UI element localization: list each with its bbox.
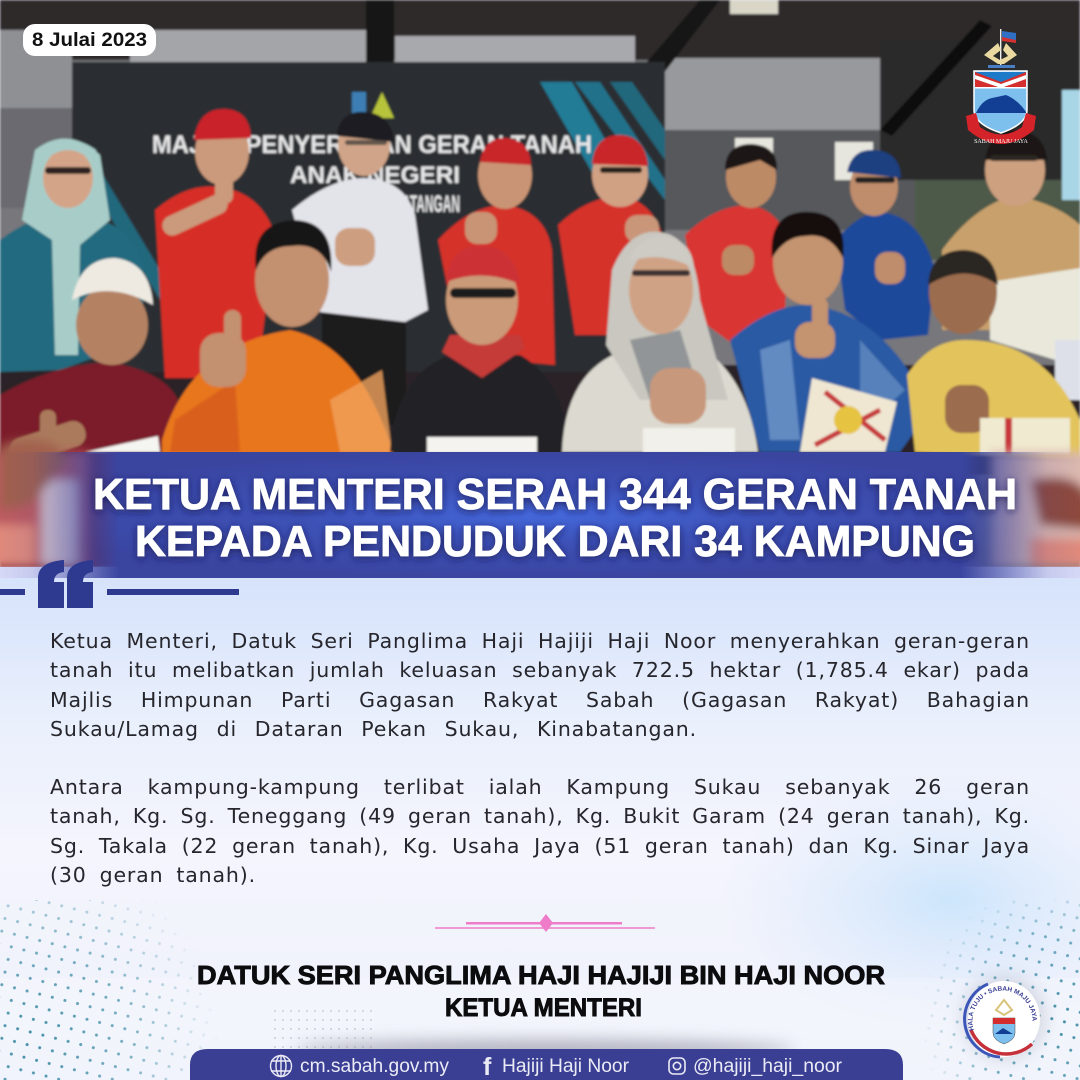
website: cm.sabah.gov.my (300, 1056, 450, 1077)
certificate held up at right (990, 268, 1080, 362)
Sabah state crest (966, 29, 1036, 145)
person: man in tan shirt (942, 130, 1080, 330)
round Hala Tuju seal: HALA TUJU • SABAH MAJU JAYA (968, 986, 1037, 1031)
stage banner: DAERAH KINABATANGAN (310, 191, 460, 218)
stage banner: MAJLIS PENYERAHAN GERAN TANAH (152, 131, 592, 159)
date pill (23, 24, 156, 56)
footer shadow (295, 1040, 795, 1060)
title text: KETUA MENTERI SERAH 344 GERAN TANAH (93, 470, 1017, 519)
person: man in yellow shirt (907, 250, 1080, 460)
person: man in red with glasses (558, 135, 665, 335)
crest shield (974, 71, 1027, 133)
halftone dots bottom left (0, 900, 230, 1080)
person: man in red without cap (685, 144, 788, 342)
body paragraph 1 (50, 629, 1030, 741)
title banner (0, 452, 1080, 578)
body paragraph 1: Sukau/Lamag di Dataran Pekan Sukau, Kinabatangan. (50, 717, 697, 741)
body paragraph 2: Sg. Takala (22 geran tanah), Kg. Usaha Jaya (51 geran tanah) dan Kg. Sinar Jaya (50, 834, 1030, 858)
cover for blur spill below photo (0, 567, 1080, 578)
quotation mark with rules (0, 560, 239, 608)
person: man in navy shirt and cap (836, 150, 935, 340)
title text: KEPADA PENDUDUK DARI 34 KAMPUNG (135, 517, 975, 566)
photo: group of recipients and leaders (0, 0, 1080, 567)
stage banner (72, 62, 665, 372)
signatory title: KETUA MENTERI (445, 994, 642, 1022)
ornament divider (435, 914, 655, 932)
body paragraph 2: tanah, Kg. Sg. Teneggang (49 geran tanah), Kg. Bukit Garam (24 geran tanah), Kg. (50, 804, 1030, 828)
instagram handle: @hajiji_haji_noor (693, 1056, 843, 1077)
signatory name: DATUK SERI PANGLIMA HAJI HAJIJI BIN HAJI NOOR (197, 960, 885, 990)
body paragraph 1: Majlis Himpunan Parti Gagasan Rakyat Sabah (Gagasan Rakyat) Bahagian (50, 688, 1030, 712)
person: woman in hijab and cream blouse (562, 232, 758, 453)
person: woman in teal, back row (0, 139, 143, 372)
white shirt at far right (1055, 340, 1080, 400)
date pill: 8 Julai 2023 (32, 30, 147, 51)
footer bar (190, 1049, 903, 1080)
person: man in black jacket and red cap (390, 246, 570, 453)
icon: instagram (669, 1058, 685, 1074)
body paragraph 1: tanah itu melibatkan jumlah keluasan sebanyak 722.5 hektar (1,785.4 ekar) pada (50, 658, 1030, 682)
crest flag and arms (984, 29, 1017, 68)
halftone dots bottom right (920, 900, 1080, 1080)
small dot grid (268, 1006, 372, 1048)
crest motto ribbon: SABAH MAJU JAYA (974, 139, 1029, 145)
page background (0, 560, 1080, 1080)
photo backdrop: stage roof and walls (0, 0, 1080, 567)
icon: globe (270, 1055, 292, 1077)
person: man in blue batik (730, 212, 930, 452)
body paragraph 2: Antara kampung-kampung terlibat ialah Kampung Sukau sebanyak 26 geran (50, 775, 1030, 799)
round Hala Tuju seal (958, 972, 1050, 1064)
person: man in white shirt and dark cap (292, 112, 428, 425)
body paragraph 2 (50, 775, 1030, 887)
body paragraph 1: Ketua Menteri, Datuk Seri Panglima Haji Hajiji Haji Noor menyerahkan geran-geran (50, 629, 1030, 653)
person: man in orange batik (162, 220, 393, 470)
facebook name: Hajiji Haji Noor (502, 1056, 630, 1077)
stage banner: ANAK NEGERI (290, 162, 460, 189)
person: man in maroon and white cap (0, 258, 178, 567)
photo lower edge: blurred hands and papers (0, 440, 1080, 567)
person: man in red, back row centre (438, 138, 555, 365)
body paragraph 2: (30 geran tanah). (50, 863, 256, 887)
title text (93, 470, 1017, 566)
person: man in red, back row left (155, 109, 275, 378)
